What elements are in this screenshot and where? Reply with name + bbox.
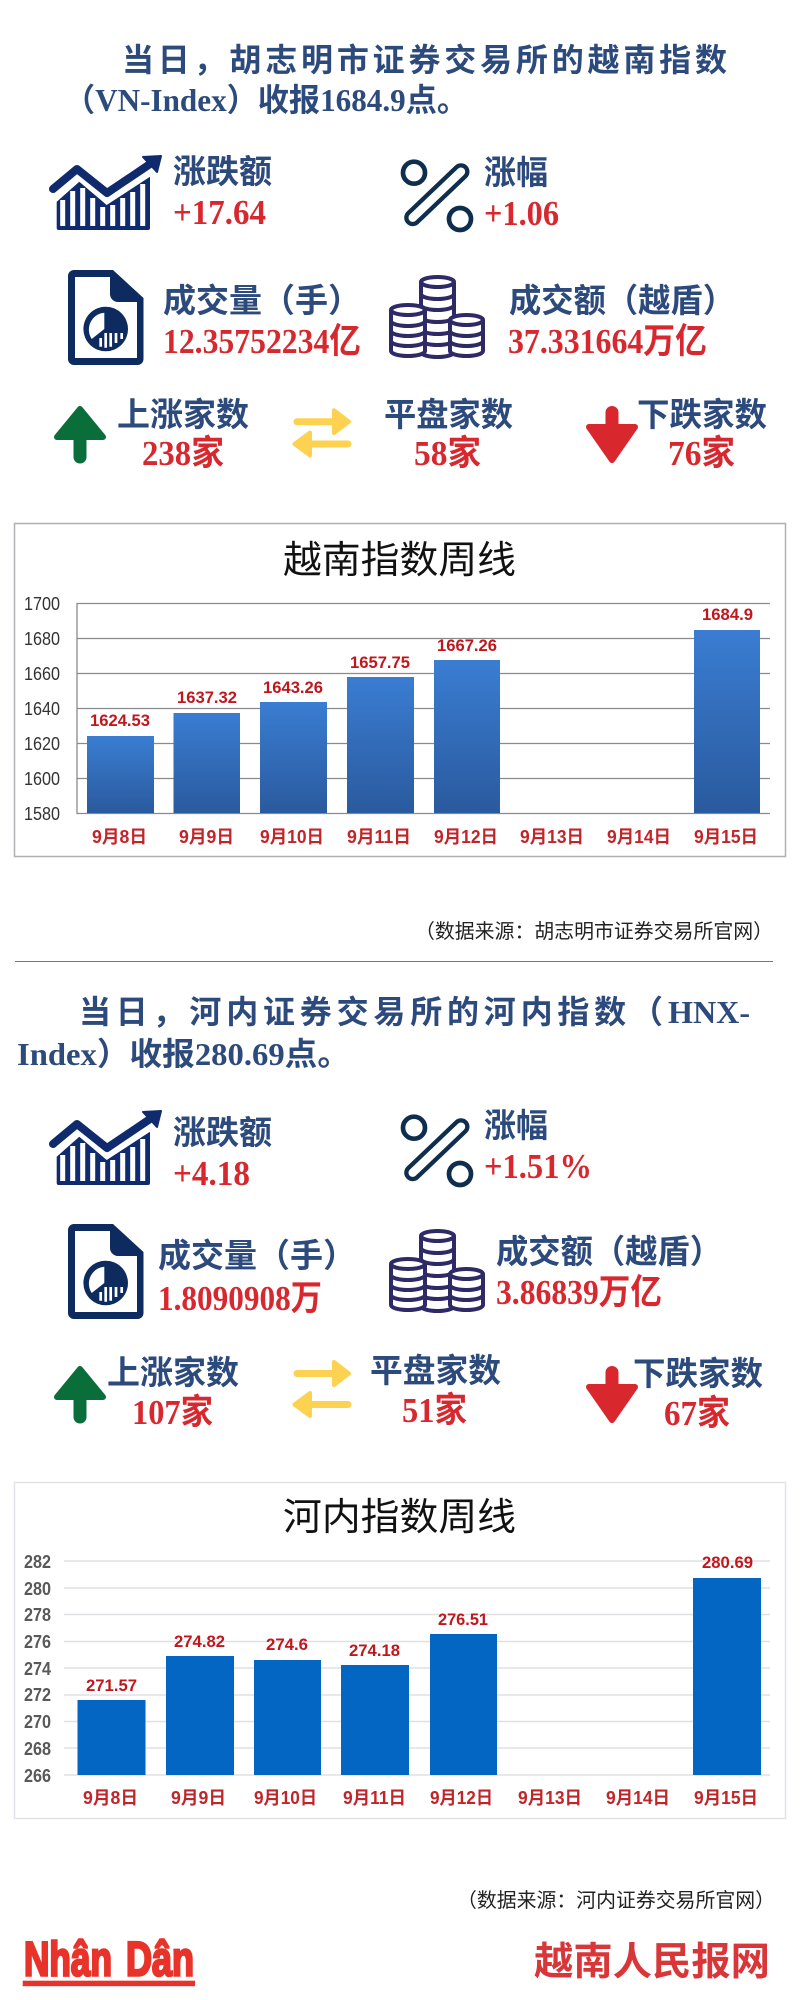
panel: HNX-Index weekly chart xyxy=(14,1482,786,1818)
date labels: 9月13日 xyxy=(518,1788,582,1808)
y axis labels xyxy=(24,1552,51,1786)
icon: up arrow xyxy=(57,1369,103,1417)
bar value labels: 280.69 xyxy=(702,1553,753,1572)
date labels xyxy=(83,1788,758,1808)
icon: percent xyxy=(403,1117,471,1185)
y axis labels: 1700 xyxy=(24,594,60,614)
stat: change percent xyxy=(484,154,559,233)
bar value labels: 1684.9 xyxy=(702,605,753,624)
stat: decliners xyxy=(633,1355,763,1433)
bar value labels xyxy=(90,605,753,730)
stat: change percent: 涨幅 xyxy=(484,1107,548,1144)
y axis labels: 278 xyxy=(24,1605,51,1625)
y axis labels: 1640 xyxy=(24,699,60,719)
y axis labels: 268 xyxy=(24,1739,51,1759)
stat: unchanged: 51家 xyxy=(402,1391,467,1430)
icon: swap arrows xyxy=(294,410,349,456)
stat: change percent: 涨幅 xyxy=(484,154,548,191)
date labels: 9月11日 xyxy=(343,1788,406,1808)
stat: turnover: 3.86839万亿 xyxy=(496,1273,662,1312)
date labels: 9月13日 xyxy=(520,827,584,847)
bar value labels: 1624.53 xyxy=(90,711,150,730)
date labels: 9月10日 xyxy=(254,1788,317,1808)
stat: volume xyxy=(158,1237,356,1318)
source note: HNX: （数据来源：河内证券交易所官网） xyxy=(457,1889,775,1912)
stat: volume: 成交量（手） xyxy=(163,282,361,319)
stat: decliners: 67家 xyxy=(664,1394,730,1433)
stat: advancers xyxy=(107,1354,239,1432)
y axis labels: 274 xyxy=(24,1659,51,1679)
date labels: 9月14日 xyxy=(606,1788,670,1808)
y axis labels: 282 xyxy=(24,1552,51,1572)
stat: volume: 1.8090908万 xyxy=(158,1279,322,1318)
icon: down arrow xyxy=(589,412,635,460)
icon: coins xyxy=(391,1231,483,1311)
bars xyxy=(87,630,760,813)
icon: document pie xyxy=(68,1224,144,1319)
stat: decliners: 下跌家数 xyxy=(637,396,767,433)
bar value labels: 1667.26 xyxy=(437,636,497,655)
bars xyxy=(78,1578,761,1775)
logo: Nhan Dan xyxy=(23,1934,195,1986)
icon: percent xyxy=(403,162,471,230)
stat: advancers: 107家 xyxy=(132,1393,213,1432)
y axis labels: 1600 xyxy=(24,769,60,789)
stat: change percent: +1.51% xyxy=(484,1147,592,1186)
date labels: 9月12日 xyxy=(430,1788,493,1808)
panel: VN-Index summary xyxy=(53,42,767,473)
stat: decliners xyxy=(637,396,767,473)
panel: HNX-Index summary xyxy=(17,994,763,1433)
date labels: 9月12日 xyxy=(434,827,498,847)
stat: volume: 12.35752234亿 xyxy=(163,322,361,361)
icon: coins xyxy=(391,277,483,357)
stat: unchanged xyxy=(384,396,513,473)
date labels: 9月8日 xyxy=(92,827,147,847)
stat: volume: 成交量（手） xyxy=(158,1237,356,1274)
icon: swap arrows xyxy=(294,1362,349,1416)
date labels: 9月14日 xyxy=(607,827,671,847)
stat: change amount: 涨跌额 xyxy=(173,1114,272,1151)
y axis labels: 280 xyxy=(24,1579,51,1599)
icon: up arrow xyxy=(57,409,103,457)
headline: VN-Index close: 当日，胡志明市证券交易所的越南指数 xyxy=(122,42,727,78)
headline: VN-Index close: （VN-Index）收报1684.9点。 xyxy=(64,82,468,118)
stat: volume xyxy=(163,282,361,361)
icon: rising chart xyxy=(53,1111,161,1185)
stat: change amount: 涨跌额 xyxy=(173,153,272,190)
stat: turnover: 成交额（越盾） xyxy=(509,282,735,319)
icon: document pie xyxy=(68,270,144,365)
y axis labels: 1620 xyxy=(24,734,60,754)
icon: rising chart xyxy=(53,156,161,230)
stat: unchanged: 平盘家数 xyxy=(370,1352,501,1389)
y axis labels: 276 xyxy=(24,1632,51,1652)
headline: HNX-Index close xyxy=(17,994,750,1072)
y axis labels: 1680 xyxy=(24,629,60,649)
bar value labels: 274.18 xyxy=(349,1641,400,1660)
stat: change percent: +1.06 xyxy=(484,194,559,233)
headline: HNX-Index close: 当日，河内证券交易所的河内指数（ xyxy=(79,994,663,1030)
stat: change amount xyxy=(173,1114,272,1193)
stat: unchanged xyxy=(370,1352,501,1430)
date labels: 9月11日 xyxy=(347,827,411,847)
stat: advancers xyxy=(117,396,249,473)
bar value labels: 1637.32 xyxy=(177,688,237,707)
y axis labels xyxy=(24,594,60,824)
headline: VN-Index close xyxy=(64,42,727,118)
bar value labels: 1643.26 xyxy=(263,678,323,697)
stat: unchanged: 58家 xyxy=(414,434,481,473)
date labels xyxy=(92,827,758,847)
y axis labels: 1660 xyxy=(24,664,60,684)
stat: change percent xyxy=(484,1107,592,1186)
headline: HNX-Index close: Index）收报280.69点。 xyxy=(17,1036,350,1072)
y axis labels: 272 xyxy=(24,1685,51,1705)
bar value labels: 1657.75 xyxy=(350,653,410,672)
date labels: 9月15日 xyxy=(694,827,758,847)
logo: Nhan Dan: Dân xyxy=(126,1934,194,1986)
headline: HNX-Index close: HNX- xyxy=(668,994,750,1030)
logo: Nhan Dan: Nhân xyxy=(24,1934,112,1986)
stat: change amount xyxy=(173,153,272,232)
bar value labels xyxy=(86,1553,753,1695)
y axis labels: 1580 xyxy=(24,804,60,824)
stat: change amount: +17.64 xyxy=(173,193,266,232)
date labels: 9月9日 xyxy=(171,1788,226,1808)
stat: turnover: 成交额（越盾） xyxy=(496,1233,722,1270)
date labels: 9月15日 xyxy=(694,1788,758,1808)
bar value labels: 271.57 xyxy=(86,1676,137,1695)
panel: VN-Index weekly chart xyxy=(14,524,786,856)
stat: turnover: 37.331664万亿 xyxy=(508,322,707,361)
date labels: 9月8日 xyxy=(83,1788,138,1808)
source note: HOSE: （数据来源：胡志明市证券交易所官网） xyxy=(415,920,773,943)
y axis labels: 270 xyxy=(24,1712,51,1732)
date labels: 9月10日 xyxy=(260,827,324,847)
stat: turnover xyxy=(496,1233,722,1312)
stat: advancers: 上涨家数 xyxy=(117,396,249,433)
chart title: 河内指数周线 xyxy=(283,1497,516,1539)
bar value labels: 274.6 xyxy=(266,1635,308,1654)
stat: advancers: 上涨家数 xyxy=(107,1354,239,1391)
date labels: 9月9日 xyxy=(179,827,234,847)
stat: advancers: 238家 xyxy=(142,434,224,473)
stat: decliners: 下跌家数 xyxy=(633,1355,763,1392)
chart title: 越南指数周线 xyxy=(283,540,516,582)
y axis labels: 266 xyxy=(24,1766,51,1786)
bar value labels: 274.82 xyxy=(174,1632,225,1651)
stat: decliners: 76家 xyxy=(668,434,735,473)
stat: change amount: +4.18 xyxy=(173,1154,250,1193)
brand: Chinese site name: 越南人民报网 xyxy=(534,1941,770,1984)
bar value labels: 276.51 xyxy=(438,1610,488,1629)
stat: unchanged: 平盘家数 xyxy=(384,396,513,433)
icon: down arrow xyxy=(589,1372,635,1420)
stat: turnover xyxy=(508,282,735,361)
